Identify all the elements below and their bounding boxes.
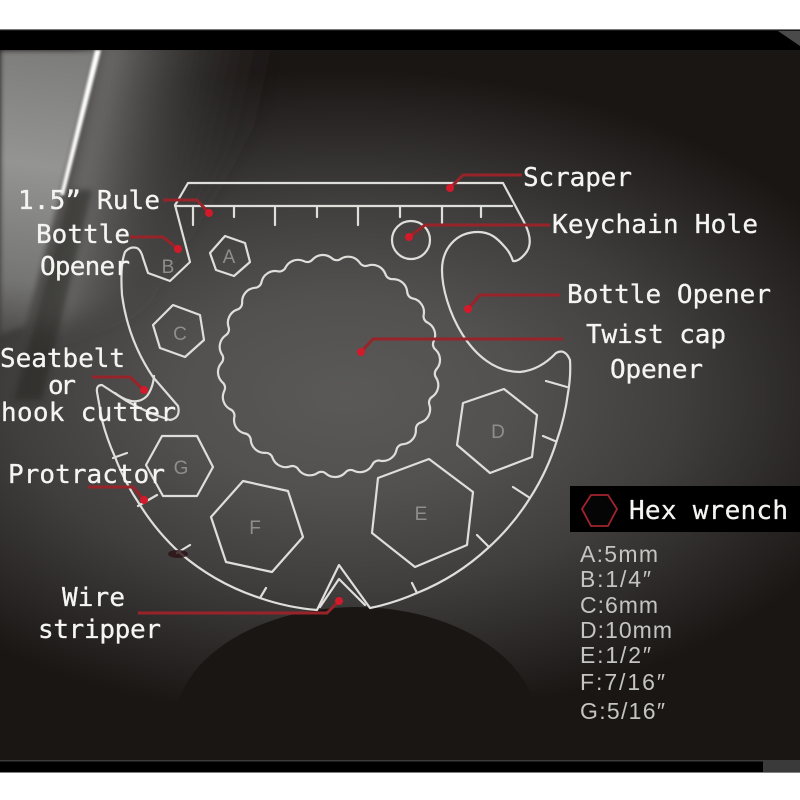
tool outline <box>97 183 570 610</box>
red leader dots <box>140 184 472 605</box>
text labels: hook cutter <box>1 398 176 428</box>
legend title: Hex wrench <box>629 496 788 526</box>
hex wrench size list <box>580 541 672 724</box>
keychain hole <box>392 221 430 259</box>
red leader lines <box>88 175 563 613</box>
hex letters <box>162 247 505 539</box>
text labels: Twist cap <box>586 320 726 350</box>
hex wrench size list: E:1/2″ <box>580 642 651 668</box>
protractor ticks <box>113 381 567 598</box>
hex wrench size list: A:5mm <box>580 541 658 567</box>
hex wrench size list: F:7/16″ <box>580 669 665 695</box>
hex F <box>211 481 303 572</box>
hex letters: B <box>162 257 174 278</box>
hex wrench size list: C:6mm <box>580 592 658 618</box>
text labels: Scraper <box>523 163 632 193</box>
top black band <box>0 29 800 50</box>
hex G <box>146 436 213 496</box>
hex letters: C <box>173 324 187 345</box>
hex D <box>457 389 537 473</box>
bottom black band <box>0 760 800 772</box>
seatbelt hook blade <box>115 376 154 401</box>
twist cap opener scallop <box>218 255 440 477</box>
hex letters: E <box>415 504 427 525</box>
text labels: 1.5” Rule <box>18 186 160 216</box>
text labels: stripper <box>38 615 161 645</box>
hex wrench size list: B:1/4″ <box>580 566 651 592</box>
hex A <box>210 236 250 276</box>
text labels: Opener <box>610 355 703 385</box>
text labels: Bottle Opener <box>567 280 771 310</box>
text labels <box>0 163 771 645</box>
icon: red hexagon <box>582 495 617 526</box>
hex wrench legend header <box>570 486 800 532</box>
faint mark near protractor tick <box>168 550 188 558</box>
text labels: or <box>48 371 76 401</box>
text labels: Wire <box>62 583 125 613</box>
text labels: Keychain Hole <box>552 210 758 240</box>
text labels: Protractor <box>8 460 165 490</box>
hex E <box>372 459 473 567</box>
hex letters: A <box>223 247 236 268</box>
hex letters: F <box>249 518 261 539</box>
hex wrench size list: G:5/16″ <box>580 698 665 724</box>
ruler edge and ticks <box>175 206 512 225</box>
text labels: Seatbelt <box>0 344 125 374</box>
wire stripper inner notch <box>320 579 365 607</box>
hex letters: G <box>174 458 188 479</box>
multi-tool card outline drawing <box>97 183 570 610</box>
text labels: Bottle <box>36 220 130 250</box>
hex C <box>153 305 204 357</box>
hex wrench size list: D:10mm <box>580 617 672 643</box>
hex letters: D <box>491 422 505 443</box>
text labels: Opener <box>40 252 130 282</box>
